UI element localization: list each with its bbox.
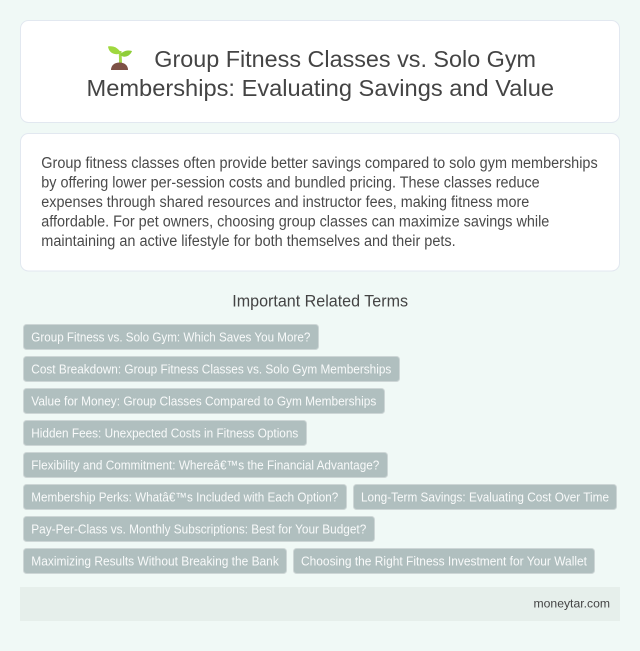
heading: title text: Memberships: Evaluating Savings and Value — [86, 75, 554, 101]
text block: summary paragraph: maintaining an active lifestyle for both themselves and their pets. — [41, 233, 456, 250]
tag: hidden fees: Hidden Fees: Unexpected Costs in Fitness Options — [31, 426, 298, 440]
tag: fitness investment — [294, 548, 594, 574]
heading: title text: Group Fitness Classes vs. Solo Gym — [154, 46, 536, 72]
tag: membership perks — [24, 484, 346, 510]
tag: maximizing results: Maximizing Results Without Breaking the Bank — [31, 554, 280, 568]
heading: title text — [86, 46, 554, 101]
tag: flexibility — [24, 452, 388, 478]
tag: long-term savings: Long-Term Savings: Evaluating Cost Over Time — [361, 490, 609, 504]
footer — [20, 587, 620, 621]
tag: cost breakdown: Cost Breakdown: Group Fitness Classes vs. Solo Gym Memberships — [31, 362, 391, 376]
related terms tags — [24, 324, 616, 574]
tag: value for money — [24, 388, 384, 414]
heading: related terms: Important Related Terms — [232, 293, 408, 311]
text block: summary paragraph: affordable. For pet owners, choosing group classes can maximize savings while — [41, 214, 549, 230]
panel: summary — [20, 134, 620, 271]
tag: flexibility: Flexibility and Commitment: Whereâ€™s the Financial Advantage? — [31, 458, 379, 472]
tag: value for money: Value for Money: Group Classes Compared to Gym Memberships — [31, 394, 376, 408]
footer: site name: moneytar.com — [534, 597, 610, 611]
tag: pay-per-class — [24, 516, 374, 542]
tag: which saves more: Group Fitness vs. Solo Gym: Which Saves You More? — [31, 330, 310, 344]
tag: hidden fees — [24, 420, 306, 446]
tag: cost breakdown — [24, 356, 400, 382]
panel: title header — [20, 20, 620, 122]
text block: summary paragraph: Group fitness classes often provide better savings compared to solo gym memberships — [41, 155, 598, 172]
tag: maximizing results — [24, 548, 286, 574]
tag: fitness investment: Choosing the Right Fitness Investment for Your Wallet — [301, 554, 587, 568]
text block: summary paragraph — [41, 155, 598, 250]
tag: pay-per-class: Pay-Per-Class vs. Monthly Subscriptions: Best for Your Budget? — [31, 522, 366, 536]
text block: summary paragraph: by offering lower per-session costs and bundled pricing. These classes reduce — [41, 174, 540, 192]
text block: summary paragraph: expenses through shared resources and instructor fees, making fitness more — [41, 194, 529, 211]
icon: seedling — [108, 46, 132, 70]
tag: long-term savings — [354, 484, 616, 510]
tag: membership perks: Membership Perks: Whatâ€™s Included with Each Option? — [31, 490, 338, 504]
tag: which saves more — [24, 324, 318, 350]
